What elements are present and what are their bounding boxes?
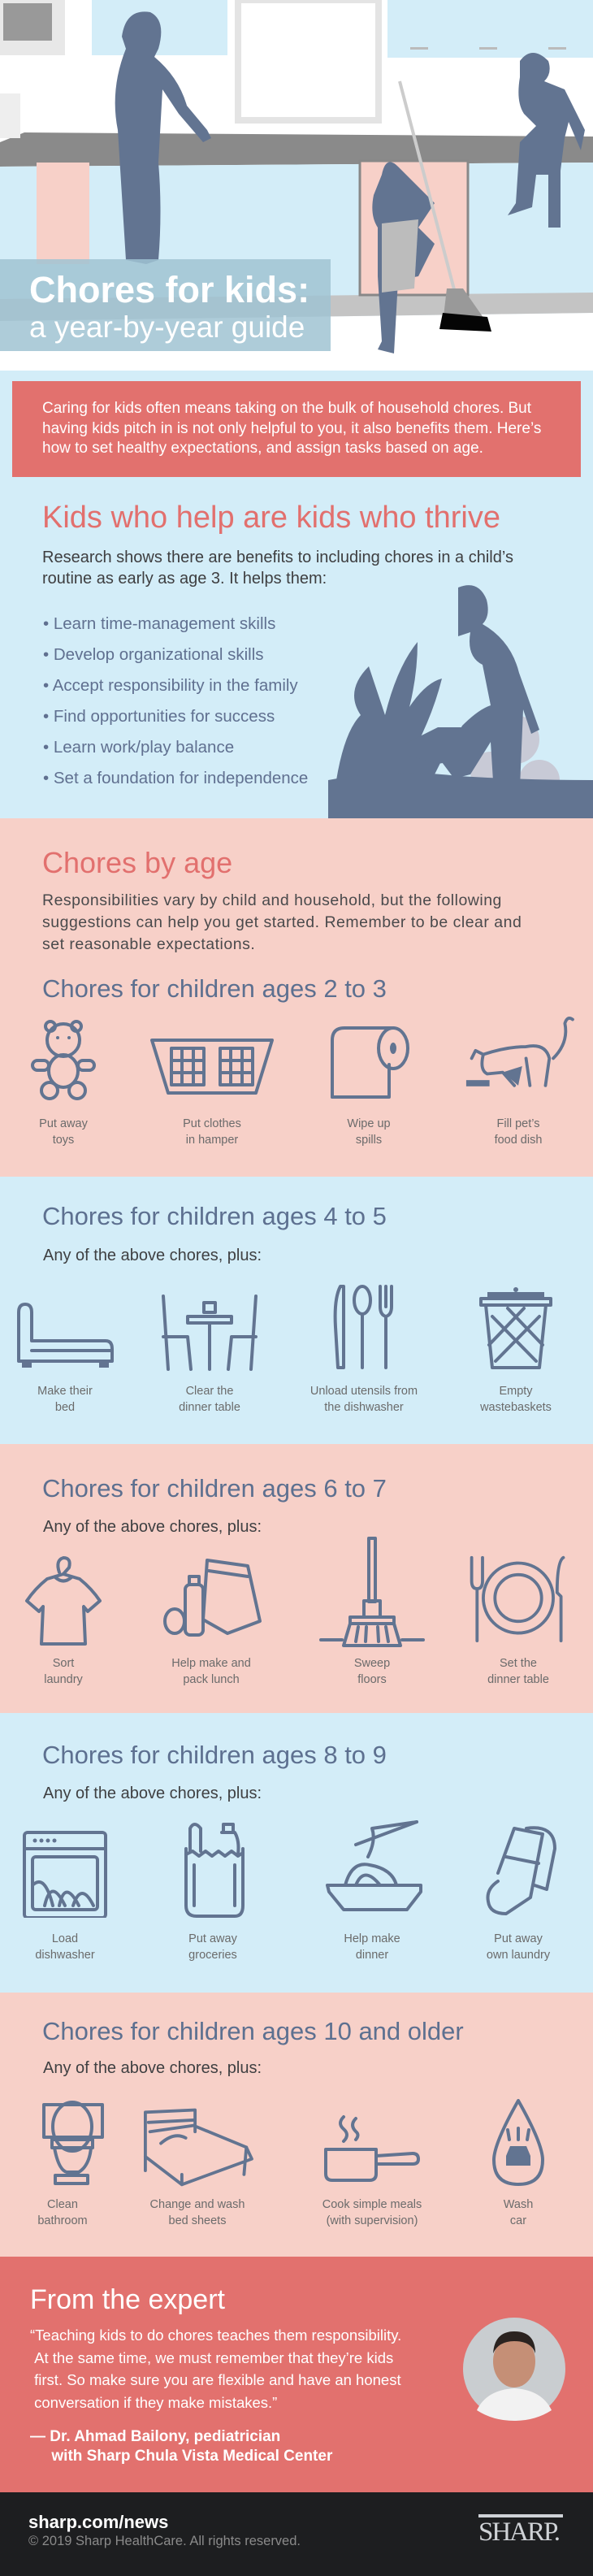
photo: doctor [462,2317,566,2421]
section: intro light blue [0,371,593,818]
icon: bed [17,1303,114,1368]
title box [0,259,331,351]
benefits list [43,614,308,787]
label: car [510,2214,526,2227]
label: Empty [499,1385,533,1398]
benefits list: • Find opportunities for success [43,707,275,726]
label: Put away [188,1932,237,1945]
intro text [42,891,522,953]
icon: socks [486,1826,556,1915]
subheading: Any of the above chores, plus: [43,1785,262,1802]
label: Sort [53,1657,74,1670]
icon: hamper [150,1039,274,1095]
attribution [30,2427,332,2466]
subheading: Any of the above chores, plus: [43,1247,262,1264]
icon: pan [319,2101,425,2190]
attribution: with Sharp Chula Vista Medical Center [51,2448,332,2465]
section: ages 4 to 5 [0,1177,593,1444]
intro callout: having kids pitch in is not only helpful to you, it also benefits them. Here’s [42,419,541,437]
icon: utensils [333,1285,393,1369]
title box: a year-by-year guide [29,310,305,344]
label [171,1657,251,1686]
logo: SHARP: SHARP. [478,2517,559,2547]
label: Clear the [186,1385,233,1398]
label: dinner table [179,1401,240,1414]
label [480,1385,552,1414]
section: ages 8 to 9 [0,1713,593,1993]
label [344,1932,400,1962]
label [494,1117,542,1147]
illustration: gardener [328,585,593,818]
label [291,2197,453,2229]
icon: paper towel [331,1026,409,1099]
label [44,1657,83,1686]
label: spills [356,1134,382,1147]
label: in hamper [186,1134,238,1147]
section: ages 10 and older [0,1993,593,2257]
label [179,1385,240,1414]
label: Set the [500,1657,537,1670]
label: Put away [494,1932,543,1945]
icon: broom [319,1537,425,1647]
section: chores by age (ages 2-3) [0,818,593,1177]
label: Wash [504,2198,533,2211]
icon: pasta bowl [326,1820,422,1911]
label: Load [52,1932,78,1945]
label: Help make [344,1932,400,1945]
expert heading: From the expert [30,2284,225,2315]
footer url: sharp.com/news [28,2512,168,2532]
label [487,1932,550,1962]
quote: At the same time, we must remember that they’re kids [34,2348,393,2366]
intro callout: Caring for kids often means taking on the bulk of household chores. But [42,400,531,417]
intro callout: how to set healthy expectations, and assign tasks based on age. [42,440,483,457]
title box: Chores for kids: [29,269,309,310]
icon: drop with car [465,2099,571,2188]
research paragraph: Research shows there are benefits to including chores in a child’s [42,549,513,566]
icon: wastebasket [479,1287,552,1369]
label [188,1932,237,1962]
benefits list: • Set a foundation for independence [43,769,308,787]
icon: bed with sheets [143,2108,253,2186]
label: Wipe up [347,1117,391,1130]
benefits list: • Learn time-management skills [43,614,275,633]
icon: shirt [24,1556,102,1646]
label: the dishwasher [324,1401,404,1414]
heading: Chores for children ages 10 and older [42,2017,464,2045]
label [347,1117,391,1147]
label: Cook simple meals [322,2198,422,2211]
label: bed [55,1401,75,1414]
icon: table and chairs [162,1295,258,1371]
section: ages 6 to 7 [0,1444,593,1713]
icon: cat [466,1017,574,1087]
label: Help make and [171,1657,251,1670]
attribution: — Dr. Ahmad Bailony, pediatrician [30,2428,280,2445]
label: Put clothes [183,1117,241,1130]
label: groceries [188,1949,237,1962]
label [310,1385,418,1414]
label [116,2197,279,2229]
heading: chores by age: Chores by age [42,846,232,879]
subheading: Any of the above chores, plus: [43,2059,262,2077]
quote: “Teaching kids to do chores teaches them responsibility. [30,2327,401,2344]
label [437,2197,593,2229]
intro text: suggestions can help you get started. Remember to be clear and [42,913,522,931]
quote: conversation if they make mistakes.” [34,2394,277,2410]
quote: first. So make sure you are flexible and have an honest [34,2371,401,2388]
footer [0,2492,593,2576]
benefits list: • Learn work/play balance [43,738,234,757]
research paragraph [42,549,513,588]
label [37,1385,93,1414]
hero illustration: kitchen [0,0,593,353]
label: toys [53,1134,74,1147]
icon: teddy bear [31,1020,96,1100]
label: laundry [44,1673,83,1686]
label: (with supervision) [327,2214,418,2227]
subheading: Any of the above chores, plus: [43,1518,262,1536]
heading: Chores for children ages 6 to 7 [42,1474,387,1503]
label: bed sheets [169,2214,226,2227]
heading: Chores for children ages 8 to 9 [42,1741,387,1769]
icon: toilet [42,2101,104,2185]
girl [372,162,435,353]
label [39,1117,88,1147]
copyright: © 2019 Sharp HealthCare. All rights reserved. [28,2534,301,2548]
man [115,11,211,264]
research paragraph: routine as early as age 3. It helps them: [42,570,327,588]
heading: kids who help: Kids who help are kids who thrive [42,501,500,535]
label: bathroom [37,2214,88,2227]
quote [30,2324,401,2413]
label [37,2198,88,2227]
icon: plate setting [470,1555,565,1642]
label [35,1932,95,1962]
boy [508,53,585,228]
label: Fill pet’s [497,1117,539,1130]
intro text: Responsibilities vary by child and household, but the following [42,891,502,909]
label: wastebaskets [480,1401,552,1414]
icon: groceries [184,1823,245,1918]
label: food dish [495,1134,542,1147]
label [354,1657,390,1686]
label: Unload utensils from [310,1385,418,1398]
label: dishwasher [35,1949,95,1962]
label: Clean [47,2198,78,2211]
intro text: set reasonable expectations. [42,935,255,953]
heading: ages 2 to 3: Chores for children ages 2 to 3 [42,974,387,1003]
label [183,1117,241,1147]
label: Change and wash [150,2198,245,2211]
label: dinner [356,1949,388,1962]
intro callout [12,381,581,477]
label: Sweep [354,1657,390,1670]
benefits list: • Accept responsibility in the family [43,676,298,695]
heading: Chores for children ages 4 to 5 [42,1202,387,1230]
icon: dishwasher [23,1831,107,1918]
label: Put away [39,1117,88,1130]
label: own laundry [487,1949,550,1962]
icon: lunch [163,1559,262,1637]
label: dinner table [487,1673,549,1686]
label [487,1657,549,1686]
label: pack lunch [183,1673,240,1686]
panel: from the expert [0,2257,593,2492]
label: Make their [37,1385,93,1398]
benefits list: • Develop organizational skills [43,645,264,664]
label: floors [357,1673,387,1686]
